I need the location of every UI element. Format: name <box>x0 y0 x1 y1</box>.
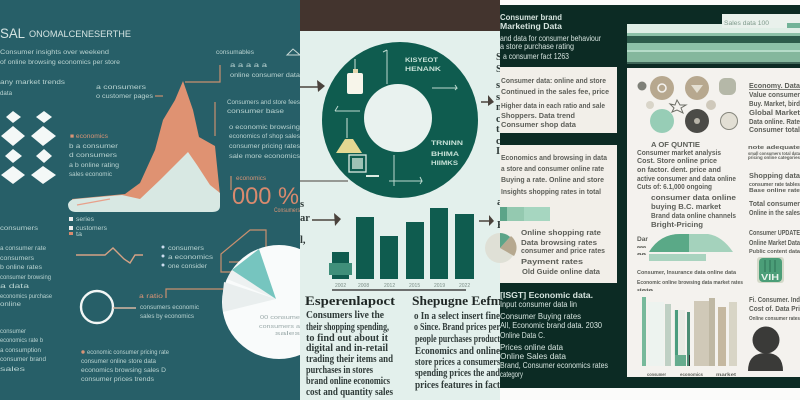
text block: bottom notes: Input consumer data lin <box>500 300 577 309</box>
text block: right column body: store prices a consumers <box>415 357 500 368</box>
text block: ring note: consumers economic <box>140 304 200 311</box>
text fragment: cut-off captions: s <box>496 80 500 91</box>
text block: left column: a data <box>0 283 30 290</box>
text block: left column body: trading their items and <box>306 354 393 365</box>
title: SAL <box>0 25 25 41</box>
text block: person caption <box>749 295 800 322</box>
heading: left column: Esperenlapoct <box>305 293 396 308</box>
dome chart: Dar <box>637 237 649 243</box>
text block: left column <box>0 225 52 373</box>
icon: person <box>748 326 783 371</box>
text block: top notes <box>500 13 601 61</box>
card: upper left: Continued in the sales fee, price <box>501 87 609 96</box>
intro text: data <box>0 90 12 97</box>
text block: chart notes: o customer pages <box>96 93 154 100</box>
text block: icon caption: Brand data online channels <box>651 211 736 220</box>
text block: pie caption: Data browsing rates <box>521 238 597 247</box>
text block: top notes: Marketing Data <box>500 22 563 31</box>
text block: icon caption: Consumer market analysis <box>637 148 721 157</box>
bar axis labels <box>647 372 737 377</box>
chart legend: customers <box>76 225 108 232</box>
text block: icon caption: on factor. dent. price and <box>637 165 721 174</box>
text block: top notes: and data for consumer behaviour <box>500 34 601 43</box>
text block: right column: Shopping data <box>749 171 800 180</box>
bar chart <box>329 208 474 290</box>
text block: pie caption <box>521 228 605 276</box>
text block: chart notes: a b online rating <box>69 162 119 169</box>
card: lower left: a store and consumer online rate <box>501 164 604 173</box>
text block: right column body: prices features in fact <box>415 380 500 391</box>
progress bar <box>500 207 550 221</box>
text block: right column: Base online rate <box>749 188 800 194</box>
text block: ring note <box>139 293 200 320</box>
percent figure: 000 % <box>232 183 299 210</box>
text block: left column body: brand online economics <box>306 376 390 387</box>
text block: right notes: sale more economics <box>229 153 301 160</box>
icon: green badge <box>757 257 784 283</box>
text fragment: cut-off captions: I <box>496 146 500 157</box>
icon: magnifier ring <box>81 291 136 323</box>
area chart <box>68 81 220 212</box>
bar labels <box>335 283 470 289</box>
text block: left column: a consumer rate <box>0 245 46 252</box>
pie connectors <box>166 230 266 298</box>
text block: left column: sales <box>0 366 26 373</box>
text block: right notes: economics of shop sales <box>229 133 301 140</box>
text block: lower notes: consumer prices trends <box>81 376 155 383</box>
text block: left column body: their shopping spending, <box>306 322 389 333</box>
chart legend: series <box>76 216 95 223</box>
icon: lamp and box <box>336 118 379 176</box>
legend list <box>162 245 214 270</box>
text block: left column: economics purchase <box>0 293 52 300</box>
donut labels: KISYEOT <box>405 57 438 64</box>
text block: left column: consumer <box>0 328 27 335</box>
icon: triangle <box>287 49 300 55</box>
text block: left column body: to find out about it <box>306 333 388 344</box>
intro text: Consumer insights over weekend <box>0 49 109 56</box>
text block: pie caption: consumer and price rates <box>521 246 605 255</box>
text block: bottom notes: Prices online data <box>500 343 564 352</box>
card: upper left: Consumer data: online and store <box>501 76 606 85</box>
pie chart: 00 consume <box>260 315 300 321</box>
text block: chart notes <box>69 84 154 178</box>
text block: left column: economics rate b <box>0 337 43 344</box>
bar labels: 2019 <box>434 283 445 289</box>
text block: left column body <box>306 310 393 398</box>
card: upper left <box>500 67 617 133</box>
text block: bottom notes: category <box>500 370 523 379</box>
text block: ring note: a ratio <box>139 293 163 300</box>
text block: right notes: Consumers and store fees <box>227 99 301 106</box>
text block: right column body: o Since. Brand prices per <box>414 322 500 333</box>
bar labels: 2002 <box>335 283 346 289</box>
text block: right column: consumer rate tables <box>749 182 800 188</box>
text block: left column: consumers <box>0 225 39 232</box>
text block: right column: Global Market <box>749 108 800 117</box>
title <box>0 25 131 41</box>
arrow: from bars <box>479 215 494 226</box>
text block: left column: consumer browsing <box>0 274 51 281</box>
bar labels: 2012 <box>384 283 395 289</box>
text fragment: cut-off captions: S <box>496 52 502 63</box>
text block: right notes: consumer base <box>227 108 284 115</box>
dome chart: aa <box>637 251 648 256</box>
text block: chart caption <box>637 270 743 292</box>
text fragment: cut-off captions: l, <box>300 235 306 246</box>
text fragment: cut-off captions: s <box>300 199 304 210</box>
text block: bottom notes: Online Sales data <box>500 352 567 361</box>
panel: mint strategy <box>300 0 504 400</box>
text fragment: cut-off captions: t <box>497 232 501 243</box>
text fragment: cut-off captions: n <box>496 102 502 113</box>
intro text: any market trends <box>0 79 66 86</box>
text fragment: cut-off captions: t <box>496 124 500 135</box>
text block: icon caption: buying B.C. market <box>651 202 722 211</box>
text block: chart notes: b a consumer <box>69 143 119 150</box>
text fragment: cut-off captions: E <box>497 220 504 231</box>
text fragment: cut-off captions: S <box>496 64 502 75</box>
text fragment: cut-off captions: a <box>497 197 503 208</box>
icon: jar <box>347 59 363 94</box>
text block: right column: note adequate <box>748 145 800 151</box>
text block: icon caption: active consumer and data online <box>637 174 736 183</box>
text block: right notes <box>216 49 301 160</box>
text block: icon caption: Cuts of: 6.1,000 ongoing <box>637 182 712 191</box>
text block: left column body: Consumers live the <box>306 310 384 321</box>
card: lower left: Buying a rate. Online and store <box>501 175 604 184</box>
text block: right column <box>748 81 800 255</box>
panel: teal analytics <box>0 0 336 400</box>
pie chart: consumers a <box>259 324 301 330</box>
text block: lower notes: economic consumer pricing rate <box>87 349 169 356</box>
text block: right column body <box>414 311 500 391</box>
text block: right column body: o In a select insert fine <box>414 311 500 322</box>
bar labels: 2015 <box>409 283 420 289</box>
legend list: a economics <box>168 254 214 261</box>
text block: lower notes: consumer online store data <box>81 358 156 365</box>
title: ONOMALCENESERTHE <box>29 29 131 40</box>
card: upper left: Consumer shop data <box>501 120 577 129</box>
legend list: one consider <box>168 263 208 270</box>
panel: dark report <box>485 0 800 400</box>
bar axis labels: market <box>716 372 737 377</box>
text block: chart caption: Economic online browsing data market rates <box>637 280 743 286</box>
pie chart <box>222 245 336 359</box>
text block: right notes: a a a a a <box>230 62 268 69</box>
text block: right notes: consumables <box>216 49 255 56</box>
text block: icon caption: consumer data online <box>651 193 736 202</box>
banner: Sales data 100 <box>724 21 770 27</box>
text block: right notes: online consumer data <box>230 72 300 79</box>
text block: left column: consumers <box>0 255 35 262</box>
text block: bottom notes: Online Data C. <box>500 331 545 340</box>
leader lines <box>155 65 231 190</box>
text block: right column body: people purchases product <box>415 334 500 345</box>
text block: left column body: digital and in-retail <box>306 343 388 354</box>
line chart <box>76 248 143 263</box>
text block: chart caption: Consumer, Insurance data online data <box>637 270 737 276</box>
percent figure: Consumers <box>274 207 301 214</box>
text block: bottom notes: Brand, Consumer economics rates <box>500 361 608 370</box>
text block: icon caption: A OF QUNTIE <box>651 140 700 149</box>
dome chart <box>637 234 733 261</box>
text block: left column: consumer brand <box>0 356 46 363</box>
text block: bottom notes <box>500 291 608 379</box>
text block: chart notes: sales economic <box>69 171 113 178</box>
text block: icon caption <box>637 140 736 229</box>
arrow: into donut <box>300 80 325 92</box>
text fragment: cut-off captions <box>300 52 504 255</box>
text block: chart notes: ■ economics <box>70 133 109 140</box>
intro text: of online browsing economics per store <box>0 59 120 66</box>
text block: chart caption: data <box>637 287 654 292</box>
text block: bottom notes: [ISGT] Economic data. <box>500 291 593 300</box>
card: lower left: Insights shopping rates in total <box>501 187 601 196</box>
donut arrows <box>335 50 457 186</box>
text fragment: cut-off captions: ar <box>300 213 310 224</box>
bar labels: 2008 <box>358 283 369 289</box>
text block: pie caption: Online shopping rate <box>521 228 601 237</box>
text block: left column: b online rates <box>0 264 43 271</box>
card: lower left <box>485 145 617 283</box>
text block: chart notes: d consumers <box>69 152 118 159</box>
text block: pie caption: Old Guide online data <box>522 267 601 276</box>
text block: pie caption: Payment rates <box>521 257 583 266</box>
text block: top notes: a store purchase rating <box>500 42 574 51</box>
text block: right column: Public content data <box>749 249 800 255</box>
text block: top notes: a consumer fact 1263 <box>503 52 569 61</box>
text block: right column: pricing online categories <box>748 155 800 160</box>
bar axis labels: consumer <box>647 372 666 377</box>
card: upper left: Shoppers. Data trend <box>501 111 575 120</box>
text block: lower notes <box>81 349 169 383</box>
donut diagram <box>322 42 478 198</box>
donut labels: HIIMKS <box>431 160 459 167</box>
bar labels: 2022 <box>459 283 470 289</box>
small pie <box>485 233 517 263</box>
icon grid <box>638 76 738 133</box>
text block: icon caption: Bright-Pricing <box>651 220 703 229</box>
text block: bottom notes: All, Economic brand data. 2030 <box>500 321 602 330</box>
pie chart: sales <box>275 331 300 337</box>
heading: right column: Shepugne Eefm <box>412 293 502 308</box>
donut labels <box>405 57 463 167</box>
dome chart: aaa <box>637 244 647 249</box>
legend list: consumers <box>168 245 205 252</box>
text fragment: cut-off captions: s <box>497 244 501 255</box>
text fragment: cut-off captions: c <box>496 136 501 147</box>
text block: icon caption: Cost. Store online price <box>637 156 717 165</box>
text block: right column body: Economics and online <box>415 346 500 357</box>
arrow: from donut <box>481 95 494 106</box>
text block: lower notes: economics browsing sales D <box>81 367 166 374</box>
panel: icons and charts <box>627 68 800 377</box>
text fragment: cut-off captions: c <box>496 114 501 125</box>
text block: left column body: cost and quantity sales <box>306 387 393 398</box>
percent figure: economics <box>236 175 267 182</box>
arrow: into bars <box>312 213 341 226</box>
card: upper left: Higher data in each ratio and sale <box>501 101 605 110</box>
text block: left column body: purchases in stores <box>306 365 373 376</box>
text block: bottom notes: Consumer Buying rates <box>500 312 581 321</box>
donut labels: HENANK <box>405 66 441 73</box>
donut labels: BHIMA <box>431 151 459 158</box>
donut labels: TRNINN <box>431 140 463 147</box>
connector line <box>300 180 348 182</box>
intro text <box>0 49 120 97</box>
text block: left column: a consumption <box>0 347 41 354</box>
chart legend <box>69 216 108 238</box>
bar axis labels: economics <box>680 372 703 377</box>
text block: right notes: o economic browsing <box>229 124 300 131</box>
grouped bars <box>642 297 737 377</box>
icon: diamonds <box>1 111 56 184</box>
text block: top notes: Consumer brand <box>500 13 562 22</box>
text fragment: cut-off captions: s <box>496 92 500 103</box>
banner <box>627 14 800 64</box>
chart legend: ta <box>76 231 82 238</box>
text block: right column body: spending prices the and <box>415 368 500 379</box>
text block: right notes: consumer pricing rates <box>229 143 301 150</box>
text block: chart notes: a consumers <box>96 84 147 91</box>
card: lower left: Economics and browsing in data <box>501 153 608 162</box>
icon: green badge: VIH <box>761 273 779 282</box>
text block: ring note: sales by economics <box>140 313 195 320</box>
text block: left column: online <box>0 301 21 308</box>
percent figure <box>232 175 301 214</box>
